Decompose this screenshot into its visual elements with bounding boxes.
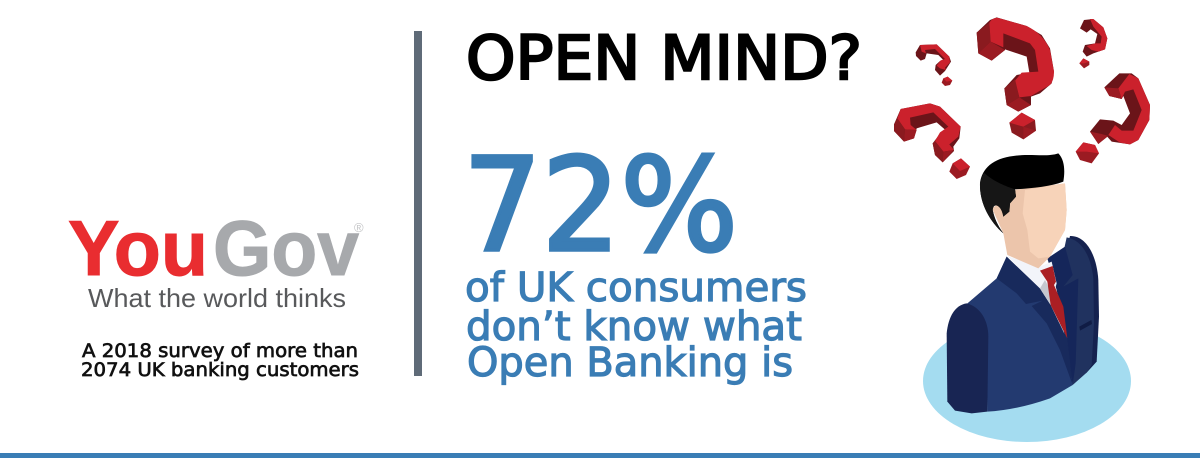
- statistic description: don’t know what: [466, 304, 802, 350]
- survey note: 2074 UK banking customers: [81, 359, 359, 381]
- head: [980, 153, 1067, 268]
- logo: YouGov: You: [68, 204, 208, 292]
- suit: [947, 236, 1099, 413]
- survey note: [81, 340, 359, 381]
- logo: YouGov: Gov: [213, 204, 360, 292]
- panel: key statistic: [463, 131, 807, 386]
- icon: left question marks: [894, 44, 970, 179]
- tagline: What the world thinks: [88, 283, 346, 313]
- title: OPEN MIND?: [466, 23, 862, 94]
- statistic: 72%: 72%: [463, 131, 738, 281]
- icon: right question marks: [1076, 19, 1150, 163]
- survey note: A 2018 survey of more than: [82, 340, 358, 362]
- icon: right question mark: [1076, 73, 1150, 163]
- icon: lower left question mark: [894, 103, 970, 179]
- panel: YouGov logo and survey note: [68, 204, 364, 381]
- logo: YouGov: ®: [354, 220, 364, 235]
- statistic description: Open Banking is: [467, 340, 793, 386]
- icon: upper right question mark: [1079, 19, 1107, 68]
- necktie: [1040, 266, 1067, 338]
- icon: large question mark: [977, 17, 1054, 139]
- icon: upper left question mark: [916, 44, 952, 86]
- statistic description: of UK consumers: [465, 265, 807, 311]
- logo: YouGov: [68, 204, 364, 292]
- icon: question marks: [894, 17, 1150, 179]
- icon: businessman illustration: [923, 153, 1131, 442]
- statistic description: [465, 265, 807, 386]
- platform ellipse: [923, 320, 1131, 442]
- shirt: [1007, 256, 1057, 305]
